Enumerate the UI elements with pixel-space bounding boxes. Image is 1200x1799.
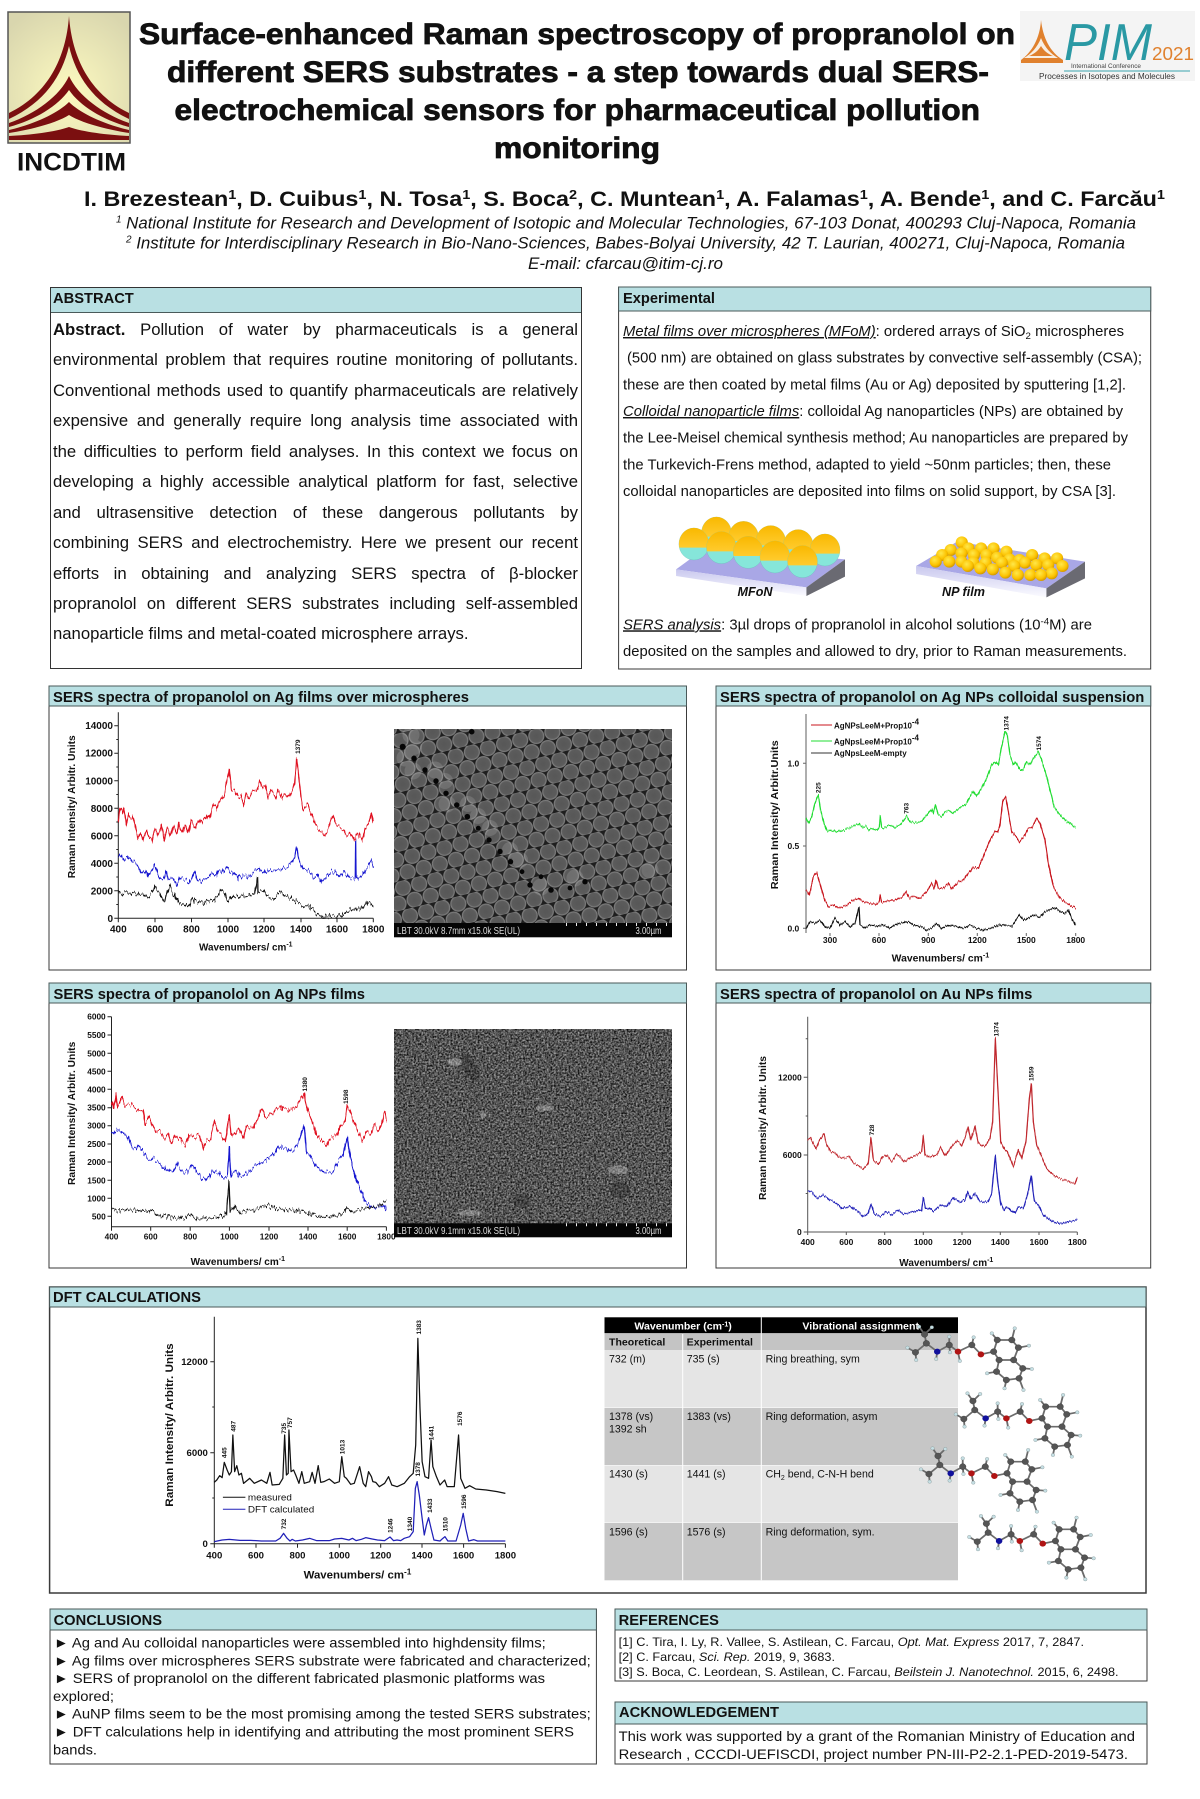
image: SEM of microsphere array [394, 726, 672, 937]
text: abstract body: environmental problem that requires routine monitoring of pollutants. [53, 350, 578, 369]
table: vibrational assignments: 732 (m) [609, 1354, 646, 1366]
chart: spectra on Ag films: 4000 [91, 859, 113, 870]
logo: INCDTIM: INCDTIM [17, 149, 126, 177]
table: vibrational assignments: 1576 (s) [687, 1526, 726, 1538]
chart: spectra on Ag films: 10000 [85, 776, 113, 787]
chart: spectra on Ag NP films: 1000 [87, 1193, 106, 1203]
chart: spectra on Ag NP films: 1000 [220, 1231, 239, 1241]
chart: measured vs DFT calculated spectra: 0 [203, 1539, 208, 1550]
title: monitoring [494, 132, 660, 165]
chart: measured vs DFT calculated spectra: 1576 [457, 1411, 464, 1426]
panel: conclusions: CONCLUSIONS [54, 1613, 162, 1629]
panel: DFT calculations: DFT CALCULATIONS [53, 1290, 201, 1306]
authors: 1 [228, 187, 236, 202]
chart: spectra on Ag NP films [67, 1012, 396, 1268]
chart: measured vs DFT calculated spectra: -1 [404, 1567, 412, 1576]
text: funding statement: This work was supported by a grant of the Romanian Ministry of Education and [619, 1728, 1135, 1744]
text: MFoM and colloidal methods: microspheres [1031, 324, 1124, 340]
chart: spectra on Ag NP films: 3000 [87, 1121, 106, 1131]
authors: 1 [462, 187, 470, 202]
title [139, 18, 1015, 165]
chart: spectra on Au NP films: 12000 [778, 1072, 802, 1082]
panel: acknowledgement [615, 1702, 1147, 1764]
chart: measured vs DFT calculated spectra: 1596 [461, 1494, 468, 1509]
chart: spectra on Ag NP films: 5500 [87, 1030, 106, 1040]
chart: spectra on Ag NP films: 500 [92, 1211, 106, 1221]
diagram: NP film [916, 536, 1085, 599]
chart: spectra on Ag NP films: 5000 [87, 1048, 106, 1058]
chart: spectra on Ag NP films: 400 [105, 1231, 119, 1241]
text: conclusions list: ► AuNP films seem to be the most promising among the tested SERS substrates; [54, 1706, 591, 1722]
text: conclusions list: ► SERS of propranolol on the different fabricated plasmonic platforms was [54, 1670, 545, 1686]
chart: measured vs DFT calculated spectra: 600 [248, 1551, 264, 1562]
logo: PIM 2021 conference [1020, 11, 1195, 81]
table: vibrational assignments: bend, C-N-H bend [785, 1469, 874, 1481]
chart: measured vs DFT calculated spectra: 1000 [329, 1551, 350, 1562]
chart: spectra in colloidal suspension: 1.0 [787, 758, 800, 768]
panel: DFT calculations [50, 1287, 1146, 1593]
chart: spectra on Ag NP films: 1600 [338, 1231, 357, 1241]
table: vibrational assignments: 1430 (s) [609, 1469, 648, 1481]
table: vibrational assignments [604, 1317, 958, 1580]
title: Surface-enhanced Raman spectroscopy of propranolol on [139, 18, 1015, 51]
panel: SERS spectra on Ag films over microspheres [49, 686, 686, 970]
chart: spectra on Ag NP films: 1380 [302, 1077, 309, 1092]
text: MFoM and colloidal methods: the Lee-Meisel chemical synthesis method; Au nanoparticles are prepared by [623, 431, 1129, 447]
chart: spectra on Ag films: 1379 [295, 739, 302, 754]
chart: spectra on Ag NP films: 1598 [343, 1089, 350, 1104]
image: SEM of Ag NP film: LBT 30.0kV 9.1mm x15.0k SE(UL) [397, 1226, 520, 1237]
authors: 1 [358, 187, 366, 202]
panel: SERS spectra on Ag NPs films: SERS spectra of propanolol on Ag NPs films [54, 987, 365, 1003]
legend: AgNpsLeeM+Prop10 [834, 738, 912, 747]
chart: measured vs DFT calculated spectra: 445 [222, 1447, 228, 1458]
chart: spectra in colloidal suspension: 0.0 [787, 923, 800, 933]
chart: measured vs DFT calculated spectra: 1441 [428, 1425, 436, 1440]
chart: spectra on Ag films: 1400 [290, 925, 313, 936]
logo: PIM 2021 conference: International Conference [1071, 64, 1142, 70]
logo: PIM 2021 conference: PIM [1064, 14, 1153, 72]
authors: , and C. Farcău [989, 188, 1157, 211]
chart: measured vs DFT calculated spectra: 1433 [427, 1498, 434, 1513]
chart: spectra on Au NP films: 1400 [991, 1237, 1010, 1247]
chart: measured vs DFT calculated spectra: 735 [281, 1422, 288, 1434]
chart: spectra on Au NP films: Raman Intensity/ Arbitr. Units [758, 1056, 769, 1200]
authors: 1 [716, 187, 724, 202]
text: MFoM and colloidal methods: 2 [1026, 331, 1031, 342]
chart: spectra in colloidal suspension: 225 [816, 782, 823, 793]
text: abstract body: propranolol on different SERS substrates including self-assembled [53, 594, 578, 613]
text: MFoM and colloidal methods: Metal films over microspheres (MFoM) : ordered arrays of SiO [623, 324, 1022, 340]
chart: measured vs DFT calculated spectra: Raman Intensity/ Arbitr. Units [164, 1343, 176, 1507]
title: electrochemical sensors for pharmaceutical pollution [174, 94, 980, 127]
chart: spectra on Ag NP films: 1200 [260, 1231, 279, 1241]
chart: spectra on Au NP films: 1000 [914, 1237, 933, 1247]
panel: SERS spectra on Ag NPs films [49, 983, 686, 1268]
logo: PIM 2021 conference: Processes in Isotopes and Molecules [1039, 72, 1175, 81]
table: vibrational assignments: 735 (s) [687, 1354, 720, 1366]
chart: spectra on Ag films: 1000 [217, 925, 240, 936]
table: vibrational assignments: CH [766, 1469, 781, 1481]
chart: spectra on Ag NP films: 2000 [87, 1157, 106, 1167]
chart: spectra on Au NP films: 1800 [1068, 1237, 1087, 1247]
panel: abstract [50, 287, 582, 669]
text: funding statement [619, 1728, 1135, 1762]
chart: spectra on Au NP films: 400 [801, 1237, 815, 1247]
text: conclusions list: explored; [53, 1688, 114, 1704]
authors: , C. Muntean [577, 188, 716, 211]
table: vibrational assignments: 2 [781, 1475, 785, 1482]
chart: spectra in colloidal suspension: 900 [921, 935, 936, 945]
chart: spectra on Ag films: 8000 [91, 804, 113, 815]
heading: abstract [51, 288, 581, 313]
chart: spectra on Ag NP films: 800 [183, 1231, 198, 1241]
chart: spectra on Au NP films: 1600 [1030, 1237, 1049, 1247]
chart: spectra on Au NP films: 1200 [953, 1237, 972, 1247]
chart: spectra on Ag films: 400 [110, 925, 127, 936]
table: vibrational assignments: -1 [722, 1321, 728, 1328]
table: vibrational assignments: 1441 (s) [687, 1469, 726, 1481]
text: MFoM and colloidal methods: Colloidal nanoparticle films : colloidal Ag nanoparticles (NPs) are obtained by [623, 404, 1124, 420]
chart: spectra in colloidal suspension: Wavenumbers/ cm [892, 954, 980, 965]
chart: spectra on Ag NP films: 6000 [87, 1012, 106, 1022]
legend: AgNPsLeeM+Prop10 [834, 722, 912, 731]
panel: references: REFERENCES [619, 1613, 719, 1629]
text: abstract body: Conventional methods used to quantify pharmaceuticals are relatively [53, 381, 578, 400]
chart: spectra in colloidal suspension: -1 [983, 953, 989, 960]
text: reference list: [3] S. Boca, C. Leordean, S. Astilean, C. Farcau, Beilstein J. Nanotechnol. 2015, 6, 2498. [619, 1665, 1119, 1679]
legend [223, 1493, 314, 1516]
legend: -4 [912, 734, 920, 743]
chart: spectra on Au NP films: 800 [878, 1237, 892, 1247]
chart: spectra on Ag films: 14000 [85, 721, 113, 732]
chart: spectra on Ag films: 800 [183, 925, 200, 936]
title: different SERS substrates - a step towards dual SERS- [167, 56, 989, 89]
panel: SERS spectra on Ag films over microspheres: SERS spectra of propanolol on Ag films over microspheres [53, 690, 469, 706]
chart: measured vs DFT calculated spectra: 12000 [181, 1357, 208, 1368]
chart: spectra on Ag films: Raman Intensity/ Arbitr. Units [67, 735, 78, 878]
image: SEM of Ag NP film: 3.00µm [636, 1226, 662, 1237]
table: vibrational assignments: ) [728, 1320, 732, 1332]
authors: , A. Bende [868, 188, 981, 211]
legend [811, 718, 920, 758]
chart: spectra on Ag films: 1600 [326, 925, 349, 936]
chart: spectra on Au NP films: 0 [797, 1227, 802, 1237]
chart: spectra on Ag films: 12000 [85, 749, 113, 760]
chart: measured vs DFT calculated spectra: 6000 [187, 1448, 208, 1459]
image: SEM of Ag NP film [394, 1029, 672, 1237]
chart: spectra on Ag films: 6000 [91, 831, 113, 842]
text: abstract body: the difficulties to perform field analyses. In this context we focus on [53, 442, 578, 461]
text: abstract body [53, 320, 578, 643]
panel: experimental [619, 287, 1151, 669]
diagram: MFoN: MFoN [738, 585, 773, 599]
affiliations [116, 214, 1136, 273]
chart: measured vs DFT calculated spectra: 400 [206, 1551, 222, 1562]
chart: spectra on Ag NP films: 3500 [87, 1103, 106, 1113]
chart: spectra on Ag NP films: 4000 [87, 1084, 106, 1094]
affiliations: 2 [125, 235, 132, 246]
chart: spectra on Au NP films: 1559 [1029, 1066, 1036, 1081]
molecule models: propranolol vibrational modes [906, 1325, 1095, 1581]
authors: , S. Boca [470, 188, 569, 211]
chart: spectra in colloidal suspension: 1574 [1036, 736, 1043, 751]
chart: spectra on Ag NP films: Raman Intensity/ Arbitr. Units [67, 1041, 78, 1185]
chart: spectra on Ag films: 600 [147, 925, 164, 936]
table: vibrational assignments: 1383 (vs) [687, 1411, 731, 1423]
affiliations: E-mail: cfarcau@itim-cj.ro [528, 254, 723, 273]
chart: measured vs DFT calculated spectra: 732 [281, 1518, 288, 1529]
authors: , N. Tosa [366, 188, 463, 211]
chart: spectra in colloidal suspension: 1374 [1003, 716, 1010, 731]
text: reference list [619, 1635, 1119, 1679]
chart: spectra on Au NP films: 1374 [994, 1022, 1001, 1037]
chart: measured vs DFT calculated spectra: 1378 [415, 1462, 422, 1477]
text: MFoM and colloidal methods: the Turkevich-Frens method, adapted to yield ~50nm particles; then, these [623, 457, 1111, 473]
chart: spectra in colloidal suspension: 1500 [1017, 935, 1036, 945]
table: vibrational assignments: Ring breathing, sym [766, 1354, 860, 1366]
image: SEM of microsphere array: LBT 30.0kV 8.7mm x15.0k SE(UL) [397, 926, 520, 937]
chart: spectra on Ag films: 0 [107, 914, 113, 925]
chart: spectra on Au NP films: Wavenumbers/ cm [899, 1258, 987, 1269]
chart: spectra on Ag NP films: Wavenumbers/ cm [191, 1257, 279, 1268]
chart: measured vs DFT calculated spectra: Wavenumbers/ cm [304, 1569, 400, 1581]
chart: spectra on Ag films: 1200 [253, 925, 276, 936]
authors: 1 [1157, 187, 1165, 202]
chart: spectra on Ag films [67, 712, 385, 954]
authors: 1 [860, 187, 868, 202]
text: MFoM and colloidal methods: these are then coated by metal films (Au or Ag) deposited by sputtering [1,2]. [623, 378, 1126, 394]
text: SERS analysis: SERS analysis: 3µl drops of propranolol in alcohol solutions (10 [623, 617, 1033, 633]
chart: spectra on Ag films: Wavenumbers/ cm [199, 943, 287, 954]
text: abstract body: and ultrasensitive detection of these dangerous pollutants by [53, 503, 578, 522]
table: vibrational assignments: Ring deformation, asym [766, 1411, 878, 1423]
legend: DFT calculated [248, 1505, 314, 1516]
text: MFoM and colloidal methods: (500 nm) are obtained on glass substrates by convective self-assembly (CSA); [627, 351, 1142, 367]
image: SEM of microsphere array: 3.00µm [636, 926, 662, 937]
text: abstract body: nanoparticle films and metal-coated microsphere arrays. [53, 624, 469, 643]
chart: spectra in colloidal suspension: 763 [903, 802, 910, 814]
panel: SERS spectra on Au NPs films [716, 983, 1151, 1269]
text: MFoM and colloidal methods [623, 324, 1142, 500]
authors: I. Brezestean [84, 188, 214, 211]
text: conclusions list: ► DFT calculations help in identifying and attributing the most prominent SERS [54, 1724, 574, 1740]
chart: spectra on Ag NP films: 1400 [299, 1231, 318, 1241]
text: abstract body: combining SERS and electrochemistry. Here we present our recent [53, 533, 578, 552]
table: vibrational assignments: 1378 (vs) [609, 1411, 653, 1423]
chart: spectra on Ag NP films: 1800 [377, 1231, 396, 1241]
legend: -4 [912, 718, 920, 727]
chart: spectra in colloidal suspension: Raman Intensity/ Arbitr.Units [770, 740, 781, 889]
chart: measured vs DFT calculated spectra: 1340 [407, 1516, 414, 1531]
affiliations: 1 [116, 214, 122, 226]
chart: measured vs DFT calculated spectra: 1246 [388, 1518, 394, 1533]
text: abstract body: Abstract. Pollution of water by pharmaceuticals is a general [53, 320, 578, 339]
chart: spectra in colloidal suspension: 1800 [1066, 935, 1085, 945]
panel: references [615, 1609, 1147, 1681]
logo: PIM 2021 conference: 2021 [1152, 44, 1194, 64]
legend: measured [248, 1493, 292, 1504]
chart: spectra on Ag NP films: 1500 [87, 1175, 106, 1185]
text: conclusions list: ► Ag films over microspheres SERS substrate were fabricated and characterized; [54, 1653, 591, 1669]
chart: measured vs DFT calculated spectra [164, 1317, 516, 1581]
chart: spectra on Au NP films: 600 [839, 1237, 854, 1247]
chart: measured vs DFT calculated spectra: 1800 [495, 1551, 516, 1562]
chart: measured vs DFT calculated spectra: 800 [289, 1551, 306, 1562]
chart: spectra in colloidal suspension: 1200 [968, 935, 987, 945]
panel: conclusions [50, 1609, 596, 1764]
chart: measured vs DFT calculated spectra: 1200 [370, 1551, 391, 1562]
chart: measured vs DFT calculated spectra: 1400 [411, 1551, 433, 1562]
chart: spectra in colloidal suspension: 0.5 [787, 841, 800, 851]
legend: AgNpsLeeM-empty [834, 749, 907, 758]
table: vibrational assignments: Experimental [687, 1337, 753, 1349]
text: funding statement: Research , CCCDI-UEFISCDI, project number PN-III-P2-2.1-PED-2019-5473. [619, 1746, 1128, 1762]
authors: , D. Cuibus [236, 188, 358, 211]
text: abstract body: efforts in obtaining and analyzing SERS spectra of β-blocker [53, 564, 578, 583]
text: reference list: [2] C. Farcau, Sci. Rep. 2019, 9, 3683. [619, 1650, 835, 1664]
chart: spectra on Ag NP films: -1 [279, 1256, 285, 1263]
affiliations: Institute for Interdisciplinary Research in Bio-Nano-Sciences, Babes-Bolyai University, 42 T. Laurian, 400271, Cluj-Napoca, Romania [132, 234, 1125, 253]
chart: spectra on Au NP films: 728 [869, 1124, 876, 1135]
chart: spectra in colloidal suspension [770, 714, 1085, 965]
table: vibrational assignments: Wavenumber (cm [634, 1320, 722, 1332]
authors: 2 [569, 187, 577, 202]
chart: spectra on Ag NP films: 600 [144, 1231, 158, 1241]
text: SERS analysis: -4 [1040, 616, 1049, 627]
text: conclusions list: ► Ag and Au colloidal nanoparticles were assembled into highdensity films; [54, 1635, 546, 1651]
table: vibrational assignments: 1596 (s) [609, 1526, 648, 1538]
text: conclusions list: bands. [53, 1741, 97, 1757]
text: SERS analysis: M) are [1049, 617, 1092, 633]
panel: experimental: Experimental [623, 291, 715, 307]
text: abstract body: developing a highly accessible analytical platform for fast, selective [53, 472, 578, 491]
chart: spectra on Ag NP films: 2500 [87, 1139, 106, 1149]
panel: SERS spectra on Ag NPs colloidal suspension [716, 686, 1151, 970]
chart: spectra in colloidal suspension: 300 [823, 935, 837, 945]
panel: acknowledgement: ACKNOWLEDGEMENT [619, 1705, 779, 1721]
chart: spectra on Ag NP films: 4500 [87, 1066, 106, 1076]
text: reference list: [1] C. Tira, I. Ly, R. Vallee, S. Astilean, C. Farcau, Opt. Mat. Express 2017, 7, 2847. [619, 1635, 1084, 1649]
chart: measured vs DFT calculated spectra: 487 [230, 1420, 237, 1432]
chart: spectra on Au NP films [758, 1017, 1087, 1269]
chart: spectra on Au NP films: -1 [987, 1257, 993, 1264]
table: vibrational assignments: Vibrational assignment [802, 1320, 920, 1332]
text: SERS analysis: deposited on the samples and allowed to dry, prior to Raman measurements. [623, 644, 1127, 660]
chart: spectra on Ag films: -1 [286, 942, 293, 949]
text: MFoM and colloidal methods: colloidal nanoparticles are deposited into films on solid support, by CSA [3]. [623, 484, 1116, 500]
chart: measured vs DFT calculated spectra: 1383 [416, 1320, 423, 1335]
panel: SERS spectra on Au NPs films: SERS spectra of propanolol on Au NPs films [720, 987, 1032, 1003]
affiliations: National Institute for Research and Development of Isotopic and Molecular Technologies, 67-103 Donat, 400293 Cluj-Napoca, Romania [122, 214, 1136, 232]
chart: spectra on Ag films: 2000 [91, 886, 113, 897]
diagram: NP film: NP film [942, 585, 985, 599]
text: abstract body: expensive and generally require long analysis time associated with [53, 411, 578, 430]
table: vibrational assignments: Theoretical [609, 1337, 665, 1349]
heading: abstract: ABSTRACT [53, 291, 134, 307]
chart: spectra on Ag films: 1800 [362, 925, 385, 936]
diagram: MFoN [676, 517, 845, 599]
text: SERS analysis [623, 616, 1127, 660]
table: vibrational assignments: 1392 sh [609, 1424, 647, 1436]
authors: , A. Falamas [724, 188, 860, 211]
panel: SERS spectra on Ag NPs colloidal suspension: SERS spectra of propanolol on Ag NPs colloidal suspension [720, 690, 1144, 706]
table: vibrational assignments: Ring deformation, sym. [766, 1526, 875, 1538]
text: conclusions list [53, 1635, 591, 1757]
chart: measured vs DFT calculated spectra: 1510 [442, 1517, 450, 1532]
chart: spectra in colloidal suspension: 600 [872, 935, 886, 945]
chart: measured vs DFT calculated spectra: 1013 [340, 1439, 347, 1454]
authors: 1 [981, 187, 989, 202]
chart: measured vs DFT calculated spectra: 757 [287, 1417, 294, 1428]
chart: measured vs DFT calculated spectra: 1600 [453, 1551, 474, 1562]
chart: spectra on Au NP films: 6000 [783, 1150, 802, 1160]
logo: INCDTIM [8, 12, 130, 177]
